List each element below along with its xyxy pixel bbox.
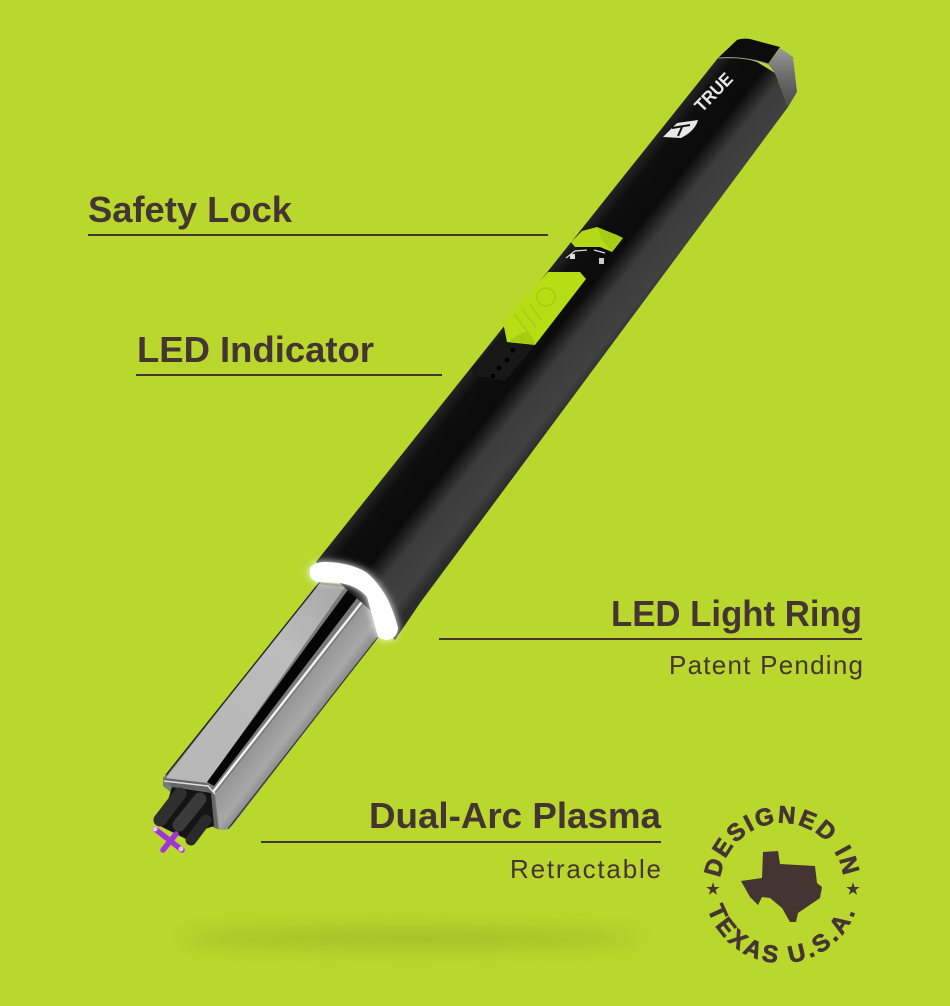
floor shadow	[180, 928, 640, 948]
LED light ring	[310, 562, 398, 640]
label: Dual-Arc Plasma: Retractable	[510, 854, 661, 884]
label: LED Light Ring: Patent Pending	[669, 650, 863, 680]
label: LED Light Ring	[439, 593, 863, 680]
black body	[316, 58, 788, 640]
safety lock slider	[566, 227, 623, 264]
label: LED Indicator: LED Indicator	[137, 329, 374, 370]
label: Safety Lock: Safety Lock	[88, 189, 293, 230]
lighter product	[152, 39, 797, 851]
brand logo: TRUE	[690, 69, 737, 116]
star right: ★	[846, 881, 860, 898]
brand logo	[663, 69, 737, 138]
badge text: DESIGNED IN	[704, 806, 860, 877]
electrode tips	[160, 787, 214, 840]
icon: Texas map	[741, 851, 822, 922]
label: LED Light Ring: LED Light Ring	[611, 593, 862, 634]
cap	[718, 39, 797, 107]
label: Dual-Arc Plasma: Dual-Arc Plasma	[369, 795, 662, 836]
power switch	[503, 272, 586, 345]
stars: ★	[706, 881, 720, 898]
label: Dual-Arc Plasma	[261, 795, 662, 884]
LED indicator holes	[470, 332, 535, 381]
purple arc	[152, 826, 184, 852]
badge: Designed in Texas U.S.A.	[704, 806, 860, 963]
metal tube	[163, 582, 378, 830]
badge: Designed in Texas U.S.A.: TEXAS U.S.A.	[709, 902, 855, 963]
